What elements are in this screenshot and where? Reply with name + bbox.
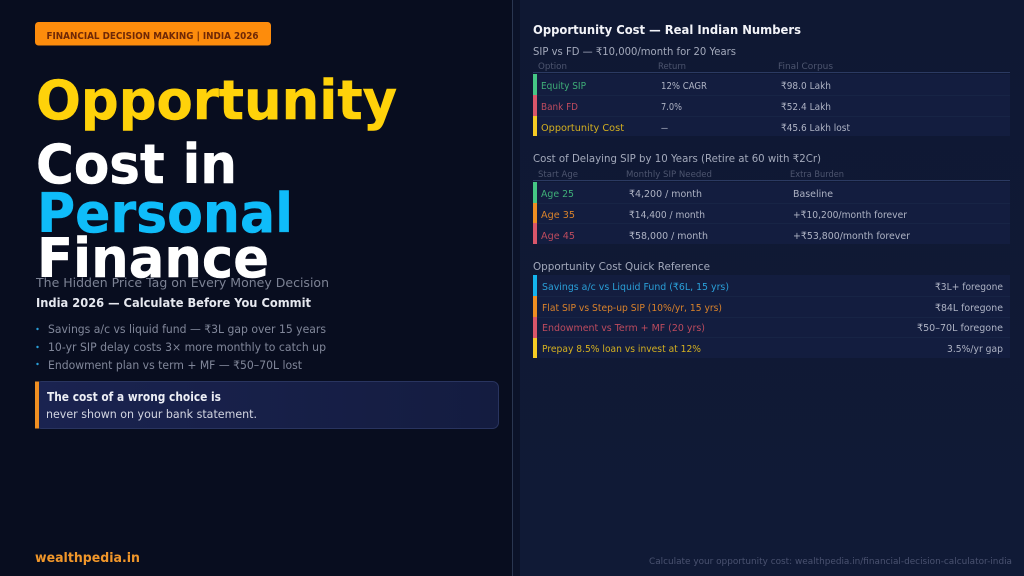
table: SIP vs FD: Return [658, 62, 686, 72]
table: SIP vs FD: ₹45.6 Lakh lost [781, 123, 850, 134]
table: quick reference [533, 261, 1010, 358]
table: cost of delaying SIP: ₹58,000 / month [629, 231, 708, 242]
table: quick reference: 3.5%/yr gap [947, 344, 1003, 355]
table: cost of delaying SIP: Age 25 [541, 189, 574, 200]
table: SIP vs FD [533, 46, 1010, 136]
callout: never shown on your bank statement. [46, 407, 257, 421]
table: cost of delaying SIP: Monthly SIP Needed [626, 170, 712, 180]
table: SIP vs FD: Opportunity Cost [541, 123, 624, 134]
bullet list: Savings a/c vs liquid fund — ₹3L gap over 15 years [48, 322, 326, 336]
table: cost of delaying SIP: Cost of Delaying SIP by 10 Years (Retire at 60 with ₹2Cr) [533, 153, 821, 165]
brand: wealthpedia.in [35, 550, 140, 566]
table: SIP vs FD: Final Corpus [778, 62, 834, 72]
table: cost of delaying SIP: Age 35 [541, 210, 575, 221]
title: Finance [37, 227, 269, 290]
table: SIP vs FD: 7.0% [661, 102, 682, 113]
footer note: Calculate your opportunity cost: wealthpedia.in/financial-decision-calculator-india [649, 557, 1012, 567]
heading: Opportunity Cost — Real Indian Numbers [533, 22, 801, 37]
table: SIP vs FD: 12% CAGR [661, 81, 707, 92]
table: quick reference: Prepay 8.5% loan vs invest at 12% [542, 344, 701, 355]
table: SIP vs FD: ₹98.0 Lakh [781, 81, 831, 92]
table: SIP vs FD: Option [538, 62, 567, 72]
table: SIP vs FD: ₹52.4 Lakh [781, 102, 831, 113]
table: cost of delaying SIP: ₹4,200 / month [629, 189, 702, 200]
table: cost of delaying SIP: +₹53,800/month forever [793, 231, 911, 242]
title: Cost in [36, 133, 237, 196]
table: cost of delaying SIP: Extra Burden [790, 170, 844, 180]
title [36, 69, 397, 290]
table: quick reference: ₹50–70L foregone [917, 323, 1003, 334]
table: quick reference: Flat SIP vs Step-up SIP (10%/yr, 15 yrs) [542, 303, 722, 314]
title: Personal [37, 182, 293, 245]
table: quick reference: Endowment vs Term + MF (20 yrs) [542, 323, 705, 334]
table: quick reference: Opportunity Cost Quick Reference [533, 261, 710, 273]
table: cost of delaying SIP: +₹10,200/month forever [793, 210, 908, 221]
bullet list: 10-yr SIP delay costs 3× more monthly to catch up [48, 340, 326, 354]
panel: right data [512, 0, 1024, 576]
table: quick reference: ₹84L foregone [935, 303, 1003, 314]
callout [35, 382, 498, 428]
table: quick reference: Savings a/c vs Liquid Fund (₹6L, 15 yrs) [542, 282, 729, 293]
table: cost of delaying SIP: Start Age [538, 170, 578, 180]
table: quick reference: ₹3L+ foregone [935, 282, 1003, 293]
callout: The cost of a wrong choice is [47, 390, 221, 404]
table: cost of delaying SIP [533, 153, 1010, 244]
table: SIP vs FD: SIP vs FD — ₹10,000/month for 20 Years [533, 46, 736, 58]
title: Opportunity [36, 69, 397, 132]
table: SIP vs FD: Bank FD [541, 102, 578, 113]
table: cost of delaying SIP: Baseline [793, 189, 833, 200]
tagline: India 2026 — Calculate Before You Commit [36, 295, 311, 310]
table: SIP vs FD: — [661, 123, 668, 134]
subtitle: The Hidden Price Tag on Every Money Decision [35, 275, 329, 290]
table: cost of delaying SIP: ₹14,400 / month [629, 210, 705, 221]
bullet list [36, 322, 326, 372]
bullet list: Endowment plan vs term + MF — ₹50–70L lost [48, 358, 302, 372]
table: cost of delaying SIP: Age 45 [541, 231, 575, 242]
table: SIP vs FD: Equity SIP [541, 81, 586, 92]
badge [35, 22, 271, 46]
panel: left hero [35, 22, 498, 566]
badge: FINANCIAL DECISION MAKING | INDIA 2026 [46, 31, 259, 42]
